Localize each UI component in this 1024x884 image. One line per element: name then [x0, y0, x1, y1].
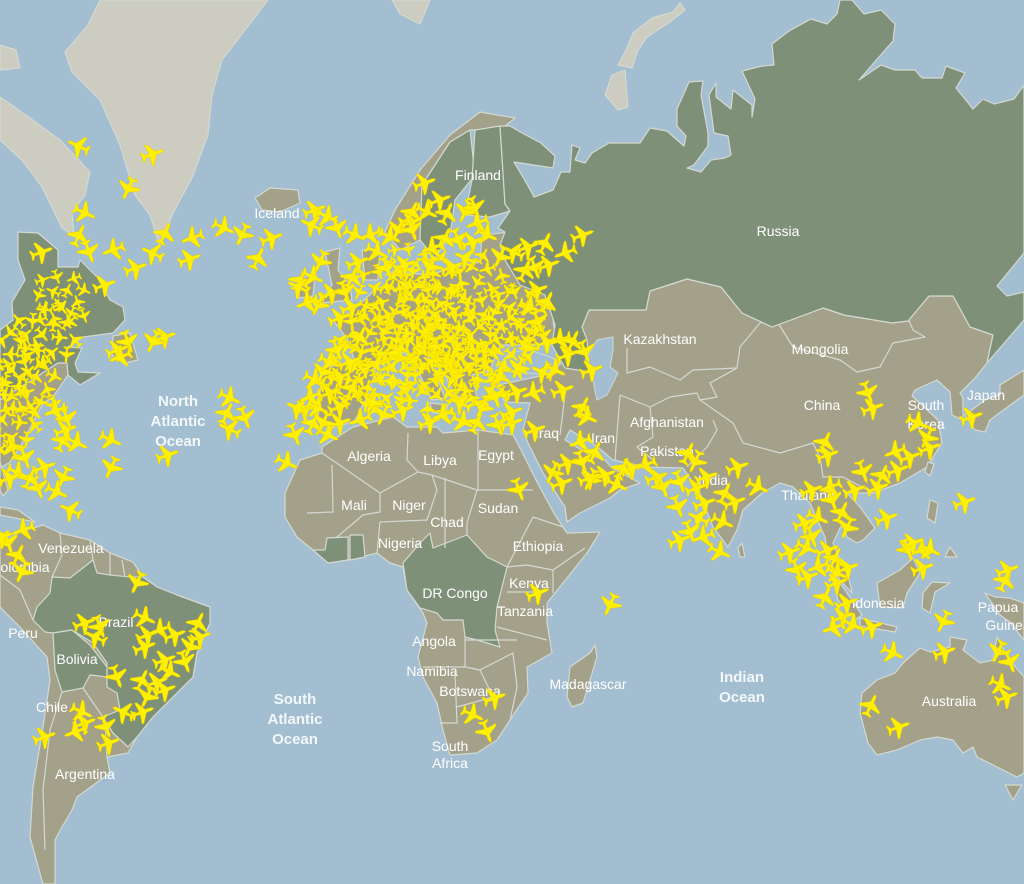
- planes: North Atlantic and Greenland: [27, 131, 287, 483]
- planes: East and Southeast Asia: [595, 378, 1023, 642]
- planes: Arabia and South Asia: [505, 428, 773, 567]
- land: Australia: [860, 637, 1024, 800]
- country and ocean labels: South: [908, 397, 944, 413]
- country and ocean labels: DR Congo: [422, 585, 488, 601]
- country and ocean labels: Russia: [757, 223, 800, 239]
- country and ocean labels: Iceland: [254, 205, 300, 221]
- country and ocean labels: Namibia: [406, 663, 458, 679]
- country and ocean labels: Peru: [8, 625, 38, 641]
- country and ocean labels: Indian: [720, 669, 764, 686]
- country and ocean labels: Atlantic: [267, 711, 323, 728]
- country and ocean labels: South: [274, 691, 316, 708]
- land: Europe: [255, 112, 555, 428]
- country and ocean labels: Tanzania: [497, 603, 553, 619]
- land: Greenland and Arctic islands: [0, 0, 685, 247]
- country and ocean labels: Angola: [412, 633, 456, 649]
- planes: South America: [30, 567, 215, 757]
- country and ocean labels: Indonesia: [844, 595, 905, 611]
- country and ocean labels: Finland: [455, 167, 501, 183]
- country and ocean labels: Ocean: [719, 689, 765, 706]
- country and ocean labels: Argentina: [55, 766, 115, 782]
- country and ocean labels: Papua: [978, 599, 1018, 615]
- country and ocean labels: Ethiopia: [513, 538, 564, 554]
- country and ocean labels: Sudan: [478, 500, 518, 516]
- country and ocean labels: Ocean: [272, 731, 318, 748]
- country and ocean labels: Japan: [967, 387, 1005, 403]
- country and ocean labels: [0, 167, 1024, 782]
- country and ocean labels: Venezuela: [38, 540, 104, 556]
- land: Asia: [498, 279, 1024, 640]
- country and ocean labels: Niger: [392, 497, 426, 513]
- country and ocean labels: Atlantic: [150, 413, 206, 430]
- planes: Africa: [457, 579, 553, 747]
- land: Africa: [285, 417, 600, 755]
- country and ocean labels: India: [698, 472, 728, 488]
- planes: Australia and Papua: [856, 636, 1024, 741]
- country and ocean labels: Botswana: [439, 683, 501, 699]
- country and ocean labels: Iran: [591, 430, 615, 446]
- land: South America: [0, 525, 210, 884]
- country and ocean labels: Brazil: [98, 614, 134, 630]
- country and ocean labels: Ocean: [155, 433, 201, 450]
- country and ocean labels: Afghanistan: [630, 414, 704, 430]
- country and ocean labels: Pakistan: [640, 443, 694, 459]
- country and ocean labels: Bolivia: [56, 651, 98, 667]
- country and ocean labels: Mali: [341, 497, 367, 513]
- land: Eastern North America: [0, 232, 138, 522]
- country and ocean labels: Mongolia: [792, 341, 849, 357]
- country and ocean labels: Africa: [432, 755, 468, 771]
- country and ocean labels: Nigeria: [378, 535, 422, 551]
- country and ocean labels: Egypt: [478, 447, 514, 463]
- country and ocean labels: Korea: [907, 416, 945, 432]
- country and ocean labels: Chile: [36, 699, 68, 715]
- country and ocean labels: Madagascar: [549, 676, 627, 692]
- country and ocean labels: Kenya: [509, 575, 549, 591]
- planes: United States and Canada: [0, 268, 94, 587]
- country and ocean labels: South: [432, 738, 468, 754]
- seas: Caspian and Black Sea: [497, 337, 618, 400]
- country and ocean labels: Australia: [922, 693, 976, 709]
- country and ocean labels: Iraq: [535, 425, 559, 441]
- country and ocean labels: Algeria: [347, 448, 391, 464]
- country and ocean labels: Thailand: [781, 487, 835, 503]
- land: Russia: [498, 0, 1024, 372]
- country and ocean labels: North: [158, 393, 198, 410]
- country and ocean labels: China: [804, 397, 840, 413]
- country and ocean labels: Kazakhstan: [623, 331, 697, 347]
- planes: Europe: [271, 169, 607, 478]
- country and ocean labels: Libya: [423, 452, 457, 468]
- country and ocean labels: Chad: [430, 514, 464, 530]
